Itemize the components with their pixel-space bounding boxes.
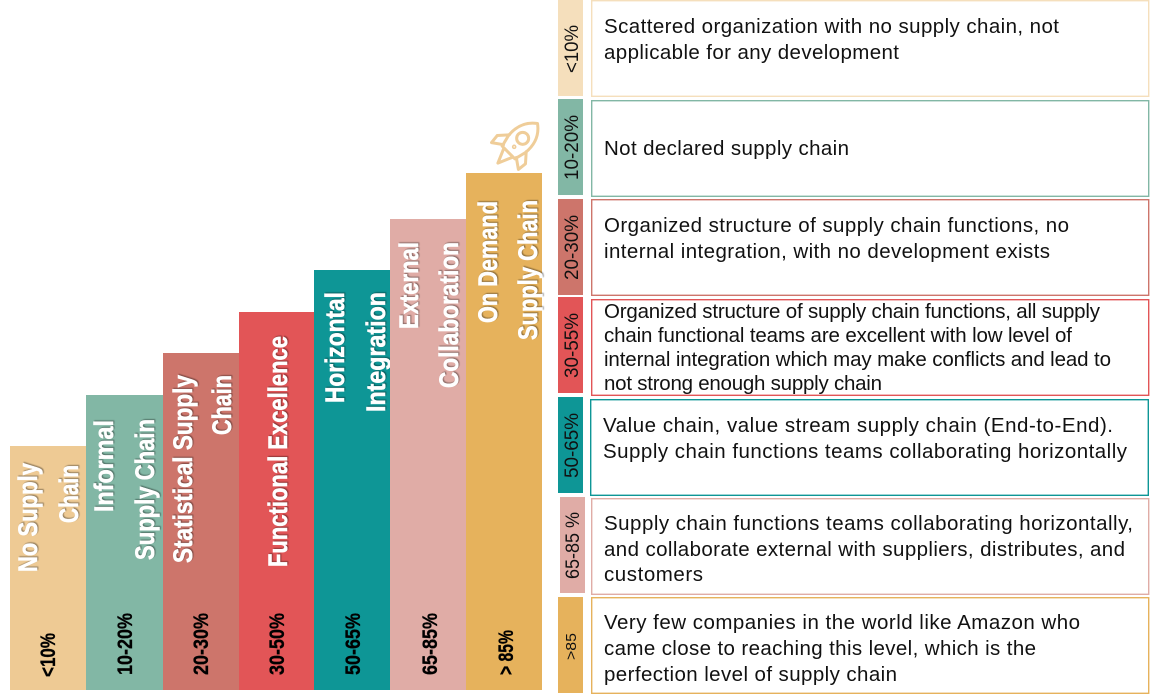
bar: Horizontal Integration: Horizontal bbox=[320, 292, 350, 403]
bar: On Demand Supply Chain: On Demand bbox=[473, 201, 503, 323]
level row: 10-20%: Not declared supply chain bbox=[604, 137, 849, 160]
bar: Functional Excellence: 30-50% bbox=[266, 613, 289, 675]
bar: On Demand Supply Chain bbox=[466, 173, 543, 690]
bar: Informal Supply Chain bbox=[86, 395, 163, 690]
level row: 30-55% bbox=[558, 297, 1149, 395]
level row: 30-55%: not strong enough supply chain bbox=[604, 372, 882, 395]
level row: 30-55%: 30-55% bbox=[561, 313, 583, 378]
bar: External Collaboration: External bbox=[394, 242, 424, 329]
bar: External Collaboration: Collaboration bbox=[434, 242, 464, 388]
bar: On Demand Supply Chain: > 85% bbox=[495, 630, 518, 675]
level row: 10-20%: 10-20% bbox=[561, 115, 583, 180]
bar: Informal Supply Chain: 10-20% bbox=[114, 613, 137, 675]
level row: 30-55%: Organized structure of supply chain functions, all supply bbox=[604, 300, 1101, 323]
level row: 65-85%: customers bbox=[604, 563, 703, 586]
level row: 65-85%: Supply chain functions teams collaborating horizontally, bbox=[604, 512, 1133, 535]
level row: 65-85%: 65-85 % bbox=[562, 512, 584, 579]
bar: Functional Excellence: Functional Excellence bbox=[263, 336, 293, 567]
staircase chart: maturity levels bbox=[10, 173, 543, 690]
bar: External Collaboration bbox=[390, 219, 466, 690]
bar: Informal Supply Chain: Informal bbox=[89, 420, 119, 512]
level row: 30-55%: chain functional teams are excellent with low level of bbox=[604, 324, 1072, 347]
level row: below 10%: <10% bbox=[561, 25, 583, 73]
bar: Horizontal Integration bbox=[314, 270, 391, 690]
level row: 20-30%: Organized structure of supply chain functions, no bbox=[604, 214, 1069, 237]
level row: 50-65%: Value chain, value stream supply chain (End-to-End). bbox=[603, 414, 1113, 437]
bar: No Supply Chain: Chain bbox=[54, 465, 84, 523]
level row: above 85: Very few companies in the world like Amazon who bbox=[604, 611, 1080, 634]
level row: 20-30%: 20-30% bbox=[561, 215, 583, 280]
bar: Statistical Supply Chain bbox=[163, 353, 239, 690]
level row: above 85: perfection level of supply chain bbox=[604, 663, 897, 686]
bar: Informal Supply Chain: Supply Chain bbox=[130, 419, 160, 560]
bar: On Demand Supply Chain: Supply Chain bbox=[513, 200, 543, 340]
level row: above 85: >85 bbox=[563, 633, 580, 660]
level row: above 85: came close to reaching this level, which is the bbox=[604, 637, 1036, 660]
bar: No Supply Chain: <10% bbox=[37, 633, 60, 677]
bar: Functional Excellence bbox=[239, 312, 314, 690]
bar: Statistical Supply Chain: Statistical Supply bbox=[168, 375, 198, 563]
bar: Statistical Supply Chain: 20-30% bbox=[190, 613, 213, 675]
level row: 50-65%: 50-65% bbox=[561, 413, 583, 478]
level row: above 85 bbox=[558, 597, 1149, 693]
bar: External Collaboration: 65-85% bbox=[419, 613, 442, 675]
level row: below 10% bbox=[558, 0, 1149, 96]
bar: No Supply Chain: No Supply bbox=[13, 463, 43, 572]
level row: 50-65% bbox=[558, 397, 1148, 495]
icon: rocket bbox=[484, 109, 552, 177]
level row: 65-85% bbox=[560, 497, 1149, 594]
level row: 50-65%: Supply chain functions teams collaborating horizontally bbox=[603, 440, 1128, 463]
level row: below 10%: Scattered organization with no supply chain, not bbox=[604, 15, 1059, 38]
bar: Horizontal Integration: 50-65% bbox=[342, 613, 365, 675]
level row: 30-55%: internal integration which may make conflicts and lead to bbox=[604, 348, 1111, 371]
bar: Statistical Supply Chain: Chain bbox=[207, 375, 237, 435]
level row: 65-85%: and collaborate external with suppliers, distributes, and bbox=[604, 538, 1125, 561]
bar: No Supply Chain bbox=[10, 446, 86, 690]
level row: 10-20% bbox=[558, 99, 1149, 196]
level row: below 10%: applicable for any development bbox=[604, 41, 899, 64]
bar: Horizontal Integration: Integration bbox=[361, 292, 391, 412]
level row: 20-30%: internal integration, with no development exists bbox=[604, 240, 1050, 263]
level row: 20-30% bbox=[558, 199, 1149, 295]
